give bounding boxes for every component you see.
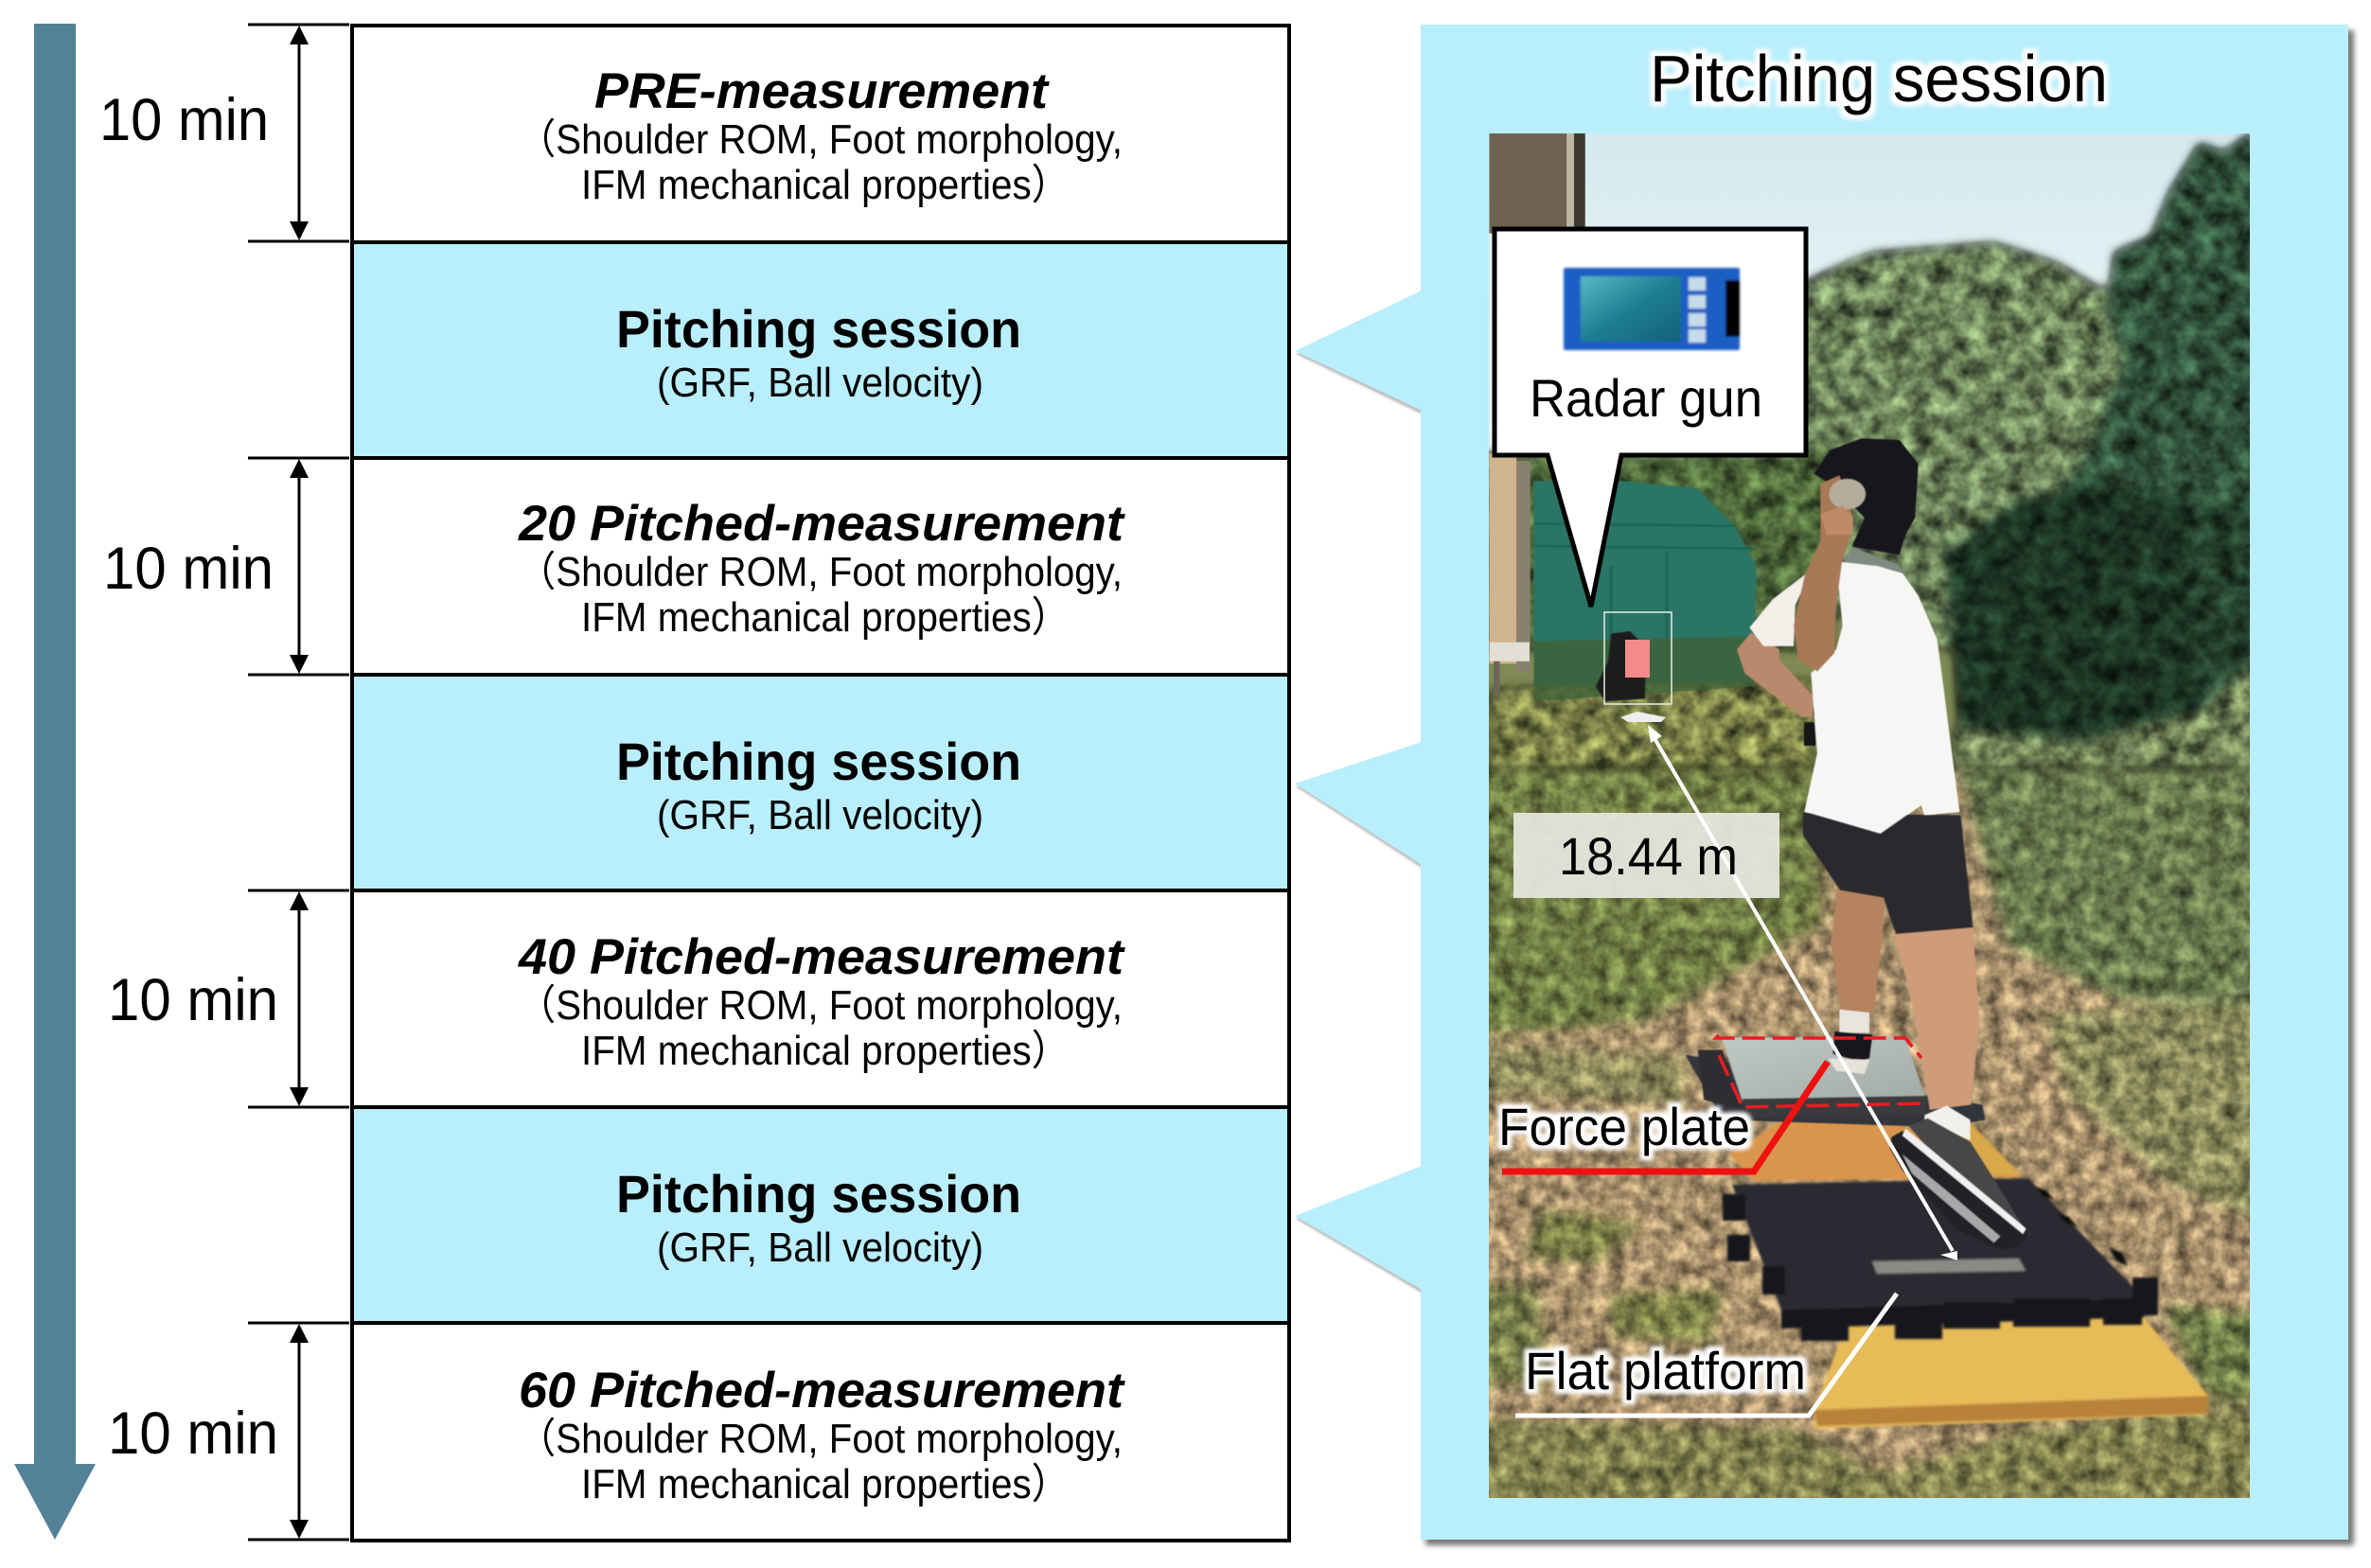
duration marker 2: 10 min (103, 536, 274, 602)
force plate leader line (1502, 1062, 1828, 1172)
row: 40 pitched measurement: （Shoulder ROM, Foot morphology, (518, 982, 1123, 1029)
row: pitching session 2: Pitching session (616, 731, 1021, 791)
callout wedges (1295, 291, 1424, 1295)
duration marker 1 (99, 25, 349, 241)
far wood board (1729, 1121, 2022, 1181)
pitcher: shirt hem over shorts (1805, 754, 1959, 834)
distance label: 18.44 m (1559, 826, 1738, 886)
row: pitching session 1 (351, 242, 1290, 458)
pitcher: upper body (1737, 438, 1959, 834)
row: 20 pitched measurement: IFM mechanical properties） (581, 594, 1070, 641)
row: 60 pitched measurement (351, 1323, 1290, 1540)
radar gun label: Radar gun (1530, 368, 1762, 428)
row: pre-measurement: （Shoulder ROM, Foot morphology, (518, 116, 1123, 163)
force plate label: Force plate (1498, 1097, 1750, 1156)
distance label box (1513, 813, 1779, 898)
panel title: Pitching session (1650, 42, 2108, 115)
flat platform leader line (1515, 1294, 1897, 1416)
building (1489, 133, 1585, 696)
row: pitching session 1: Pitching session (616, 299, 1021, 359)
row: 20 pitched measurement: （Shoulder ROM, Foot morphology, (518, 549, 1123, 595)
timeline table (351, 25, 1290, 1541)
ground (1475, 766, 2274, 1514)
row: pre-measurement (351, 25, 1290, 242)
row: 60 pitched measurement: 60 Pitched-measurement (519, 1363, 1125, 1418)
duration marker 4 (108, 1323, 349, 1540)
background scene (1481, 131, 2267, 802)
force plate outline (1716, 1035, 1926, 1107)
row: pre-measurement: IFM mechanical properties） (581, 162, 1070, 208)
flight line with arrowheads (1648, 725, 1957, 1260)
force plate label: Force plate (1498, 1097, 1750, 1156)
home plate (1620, 712, 1666, 722)
flat platform label: Flat platform (1525, 1341, 1806, 1401)
row: 40 pitched measurement (351, 890, 1290, 1107)
time arrow (14, 24, 96, 1540)
row: 20 pitched measurement (351, 458, 1290, 675)
panel title: Pitching session (1650, 42, 2108, 115)
row: 60 pitched measurement: IFM mechanical properties） (581, 1461, 1070, 1507)
duration marker 3: 10 min (108, 967, 278, 1033)
row: 20 pitched measurement: 20 Pitched-measurement (518, 496, 1125, 552)
far mat and force plate (1686, 1037, 1986, 1127)
row: pitching session 3: (GRF, Ball velocity) (657, 1224, 983, 1271)
sky (1489, 133, 2250, 531)
pitcher: legs (1803, 813, 1979, 1110)
row: pitching session 2 (351, 675, 1290, 890)
flat platform label: Flat platform (1525, 1341, 1806, 1401)
callout: radar gun (1495, 229, 1806, 607)
near black mat (1723, 1178, 2158, 1341)
panel: pitching session detail (1295, 25, 2354, 1545)
pink target (1625, 640, 1650, 678)
row: 40 pitched measurement: 40 Pitched-measurement (518, 929, 1125, 985)
near wood board (1814, 1306, 2208, 1429)
row: pitching session 2: (GRF, Ball velocity) (657, 792, 983, 838)
row: pitching session 3: Pitching session (616, 1164, 1021, 1224)
duration marker 1: 10 min (99, 87, 269, 153)
icon: radar gun (1564, 268, 1740, 350)
row: pre-measurement: PRE-measurement (594, 63, 1050, 119)
target zone (1604, 612, 1672, 704)
row: pitching session 1: (GRF, Ball velocity) (657, 360, 983, 406)
photo: pitcher on force plate (1475, 131, 2274, 1514)
row: 40 pitched measurement: IFM mechanical properties） (581, 1028, 1070, 1074)
pitcher: shoes and socks (1829, 1010, 2027, 1250)
duration marker 3 (108, 890, 349, 1107)
duration marker 2 (103, 458, 349, 675)
catcher (1596, 631, 1645, 701)
row: pitching session 3 (351, 1107, 1290, 1323)
duration marker 4: 10 min (108, 1401, 278, 1467)
backstop net (1534, 481, 1757, 701)
row: 60 pitched measurement: （Shoulder ROM, Foot morphology, (518, 1416, 1123, 1462)
